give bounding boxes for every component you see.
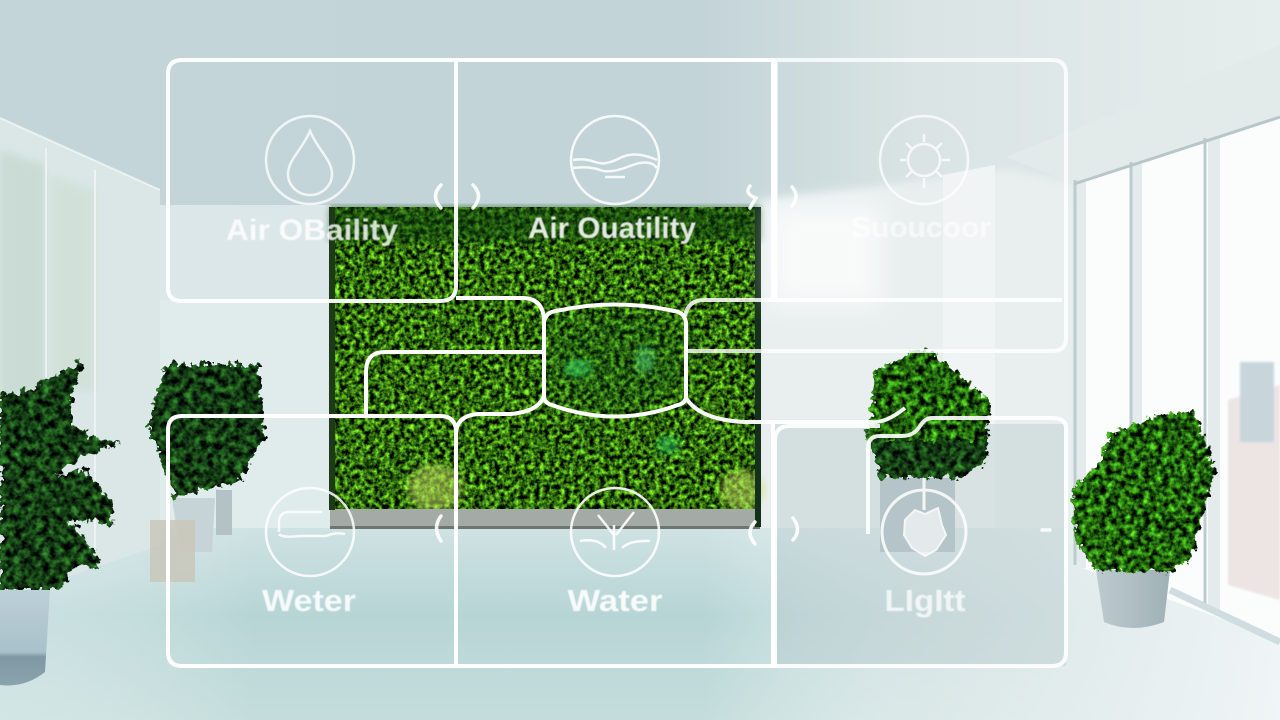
label: water: Weter [262, 583, 356, 618]
icon: sun [880, 116, 968, 204]
panel: top middle [458, 60, 773, 298]
icon: water waves [571, 116, 659, 204]
plant: right [1072, 410, 1215, 628]
plant: large left [0, 360, 121, 685]
panel: bottom right [775, 418, 1066, 666]
connector: hub to right panels [686, 398, 905, 422]
label: air quality: Air Ouatility [528, 212, 696, 245]
icon: water drop [266, 116, 354, 204]
connector: hub to left panels [366, 298, 544, 434]
panel: top right [685, 60, 1066, 351]
panel: bottom middle [456, 420, 773, 666]
label: sunlight: Suoucoor [851, 212, 991, 244]
small bracket marks [436, 185, 1050, 544]
icon: light [882, 478, 966, 574]
green living wall [329, 207, 764, 529]
tint of lower right panel [775, 424, 1066, 666]
central hub [544, 304, 686, 416]
plant: back left [148, 364, 265, 582]
icon: vehicle outline [266, 488, 354, 576]
panel: bottom left [168, 416, 456, 666]
right window wall [1074, 117, 1280, 642]
icon: plant roots [571, 488, 659, 576]
label: air quality: Air OBaility [226, 214, 398, 247]
label: water: Water [568, 583, 662, 618]
glass highlight on top right panel [770, 205, 880, 305]
label: light: LIgItt [884, 583, 966, 618]
left glass partition [0, 118, 160, 600]
panel: top left [168, 60, 456, 301]
plant: back right [866, 347, 990, 552]
